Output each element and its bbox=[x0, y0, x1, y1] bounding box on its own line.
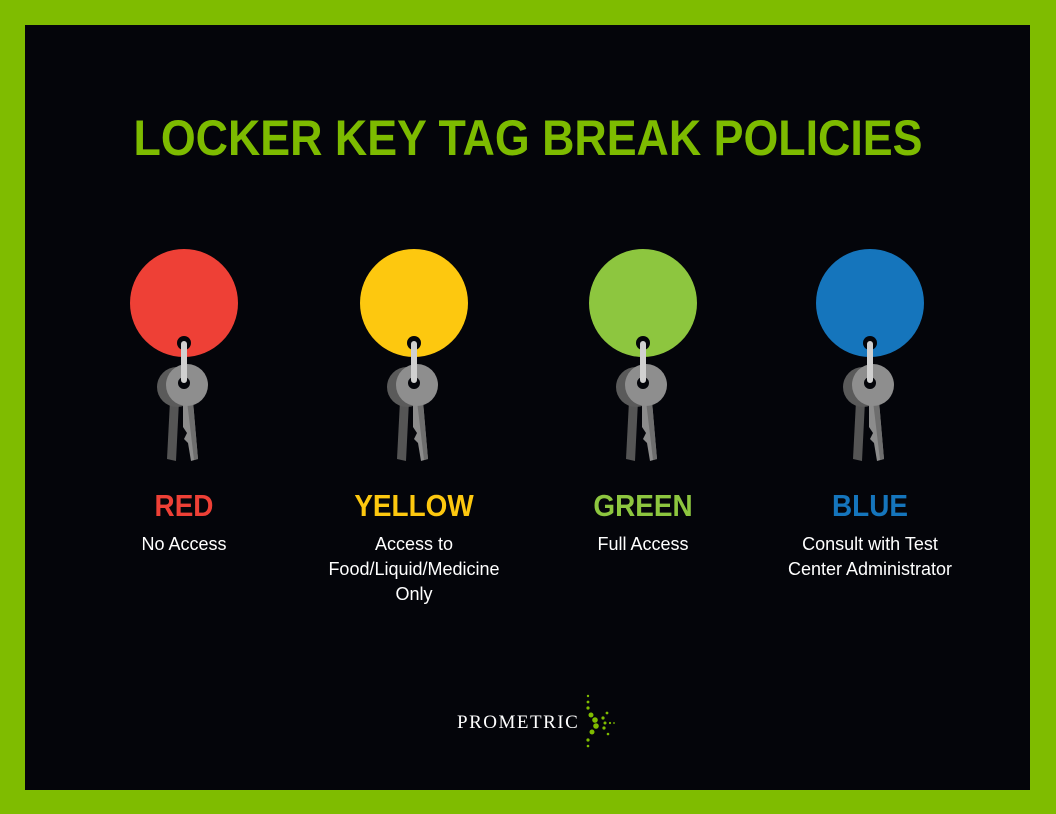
label: green bbox=[593, 488, 693, 554]
label: blue: Consult with Test bbox=[802, 534, 938, 554]
label: green: GREEN bbox=[593, 488, 693, 523]
label: red bbox=[141, 488, 227, 554]
title: LOCKER KEY TAG BREAK POLICIES bbox=[134, 110, 922, 166]
label: red: RED bbox=[155, 488, 213, 523]
label: yellow: Only bbox=[395, 584, 432, 604]
label: yellow: YELLOW bbox=[354, 488, 474, 523]
label: green: Full Access bbox=[597, 534, 689, 554]
label: blue bbox=[788, 488, 952, 579]
logo bbox=[457, 694, 615, 748]
label: yellow bbox=[328, 488, 500, 604]
label: yellow: Access to bbox=[375, 534, 453, 554]
label: blue: Center Administrator bbox=[788, 559, 952, 579]
label: red: No Access bbox=[141, 534, 227, 554]
label: blue: BLUE bbox=[832, 488, 908, 523]
logo: PROMETRIC bbox=[457, 712, 579, 733]
label: yellow: Food/Liquid/Medicine bbox=[328, 559, 500, 579]
